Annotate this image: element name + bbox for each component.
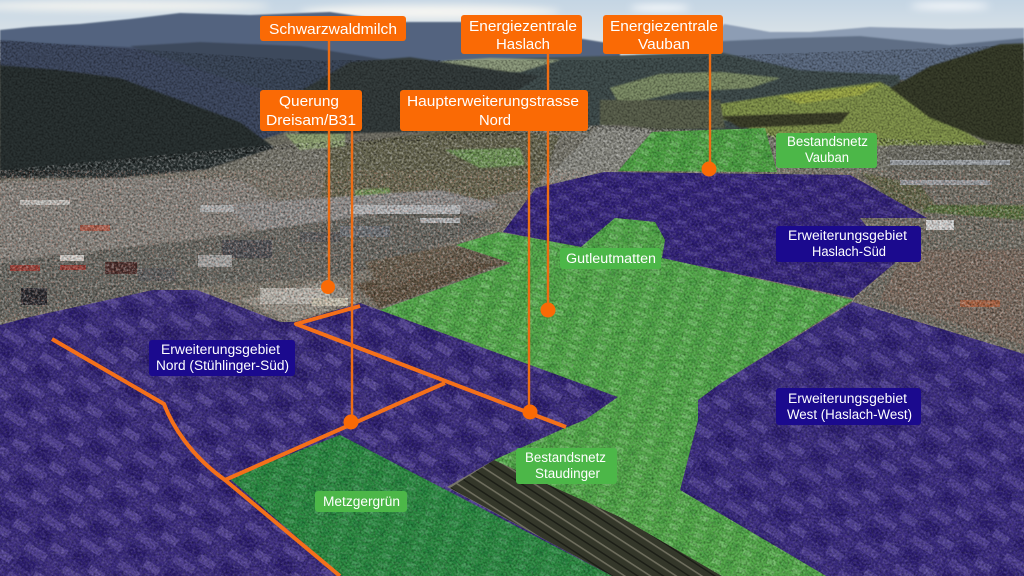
- label: Erweiterungsgebiet Haslach-Süd: [776, 226, 921, 262]
- label: Erweiterungsgebiet West: [776, 388, 921, 425]
- leader: Energiezentrale Haslach: [540, 52, 556, 318]
- label: Querung Dreisam/B31: Dreisam/B31: [266, 112, 356, 129]
- label: Haupterweiterungstrasse Nord: Haupterweiterungstrasse: [407, 93, 579, 110]
- label: Energiezentrale Vauban: [603, 15, 723, 54]
- label: Querung Dreisam/B31: [260, 90, 362, 131]
- route: cross branch: [225, 383, 445, 480]
- label: Energiezentrale Haslach: [461, 15, 582, 54]
- overlay grain: [0, 125, 1024, 576]
- panel: orange route network: [52, 40, 716, 576]
- label: Bestandsnetz Staudinger: Bestandsnetz: [525, 450, 606, 465]
- label: Schwarzwaldmilch: [260, 16, 406, 41]
- label: Bestandsnetz Staudinger: Staudinger: [535, 466, 600, 481]
- label: Metzgergrün: [315, 491, 407, 512]
- label: Erweiterungsgebiet Nord: Erweiterungsgebiet: [161, 342, 280, 357]
- route: main line west: [52, 339, 340, 576]
- label: Energiezentrale Vauban: Vauban: [638, 36, 690, 53]
- label: Erweiterungsgebiet Nord: Nord (Stühlinger-Süd): [156, 358, 289, 373]
- area: Metzgergrün: [229, 435, 612, 576]
- label: Erweiterungsgebiet Nord: [149, 340, 295, 376]
- label: Haupterweiterungstrasse Nord: [400, 90, 588, 131]
- label: Energiezentrale Vauban: Energiezentrale: [610, 18, 718, 35]
- city buildings: [10, 160, 1010, 307]
- label: Erweiterungsgebiet West: West (Haslach-West): [787, 407, 912, 422]
- area: Gutleutmatten and Haslach: [380, 218, 853, 576]
- label: Bestandsnetz Vauban: [776, 133, 877, 168]
- area: Erweiterungsgebiet Nord: [0, 290, 618, 576]
- leader: Querung Dreisam/B31: [344, 130, 358, 430]
- area: Erweiterungsgebiet Haslach-Süd: [503, 172, 927, 298]
- label: Metzgergrün: Metzgergrün: [323, 494, 400, 509]
- label: Schwarzwaldmilch: Schwarzwaldmilch: [269, 21, 397, 38]
- route: main northern line: [296, 306, 566, 427]
- label: Bestandsnetz Staudinger: [516, 448, 617, 484]
- label: Gutleutmatten: [560, 248, 661, 269]
- leader: Schwarzwaldmilch: [321, 40, 335, 294]
- leader: Haupterweiterungstrasse Nord: [522, 130, 538, 420]
- label: Erweiterungsgebiet West: Erweiterungsgebiet: [788, 391, 907, 406]
- label: Energiezentrale Haslach: Energiezentrale: [469, 18, 577, 35]
- label: Energiezentrale Haslach: Haslach: [496, 36, 550, 53]
- label: Querung Dreisam/B31: Querung: [279, 93, 339, 110]
- panel: green existing network areas: [229, 128, 888, 576]
- label: Haupterweiterungstrasse Nord: Nord: [479, 112, 511, 129]
- area: Erweiterungsgebiet West: [680, 302, 1024, 576]
- area: Bestandsnetz Vauban: [618, 128, 888, 175]
- panel: purple expansion areas: [0, 172, 1024, 576]
- town grain: [0, 125, 1024, 360]
- railway tracks: [450, 460, 722, 576]
- label: Gutleutmatten: Gutleutmatten: [566, 251, 656, 266]
- label: Bestandsnetz Vauban: Bestandsnetz: [787, 134, 868, 149]
- label: Bestandsnetz Vauban: Vauban: [805, 150, 849, 165]
- terrain grain: [0, 40, 1024, 180]
- label: Erweiterungsgebiet Haslach-Süd: Haslach-Süd: [812, 244, 886, 259]
- label: Erweiterungsgebiet Haslach-Süd: Erweiterungsgebiet: [788, 228, 907, 243]
- leader: Energiezentrale Vauban: [702, 52, 716, 176]
